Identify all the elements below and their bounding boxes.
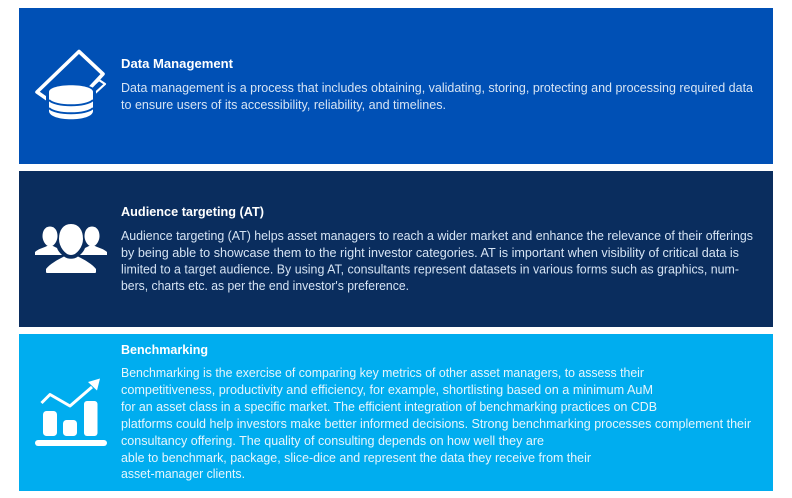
text: benchmarking description: consultancy offering. The quality of consulting depends on how well they are (121, 434, 544, 448)
heading: benchmarking: Benchmarking (121, 343, 208, 357)
heading: data management: Data Management (121, 57, 234, 71)
text: audience targeting description (121, 229, 753, 293)
text: data management description: Data management is a process that includes obtaining, validating, storing, protecting and processing required data (121, 81, 753, 95)
icon: cards and database (37, 52, 105, 122)
text: benchmarking description: able to benchmark, package, slice-dice and represent the data they receive from their (121, 451, 591, 465)
text: benchmarking description: asset-manager clients. (121, 467, 245, 481)
text: data management description: to ensure users of its accessibility, reliability, and timelines. (121, 98, 446, 112)
text: audience targeting description: by being able to showcase them to the right investor categories. AT is important when visibility of critical data is (121, 246, 739, 260)
text: benchmarking description: Benchmarking is the exercise of comparing key metrics of other asset managers, to assess their (121, 366, 644, 380)
text: benchmarking description (121, 366, 751, 481)
text: audience targeting description: limited to a target audience. By using AT, consultants represent datasets in various forms such as graphics, num- (121, 262, 739, 276)
icon: group of people (35, 224, 107, 273)
icon: bar chart with rising arrow (35, 378, 107, 446)
panel: benchmarking (19, 334, 773, 491)
panel: audience targeting (19, 171, 773, 327)
text: audience targeting description: Audience targeting (AT) helps asset managers to reach a wider market and enhance the relevance of their offerings (121, 229, 753, 243)
text: benchmarking description: for an asset class in a specific market. The efficient integration of benchmarking practices on CDB (121, 400, 657, 414)
text: benchmarking description: competitiveness, productivity and efficiency, for example, shortlisting based on a minimum AuM (121, 383, 653, 397)
text: audience targeting description: bers, charts etc. as per the end investor's preference. (121, 279, 409, 293)
text: data management description (121, 81, 753, 112)
panel: data management (19, 8, 773, 164)
heading: audience targeting: Audience targeting (AT) (121, 205, 264, 219)
text: benchmarking description: platforms could help investors make better informed decisions. Strong benchmarking processes complement their (121, 417, 751, 431)
